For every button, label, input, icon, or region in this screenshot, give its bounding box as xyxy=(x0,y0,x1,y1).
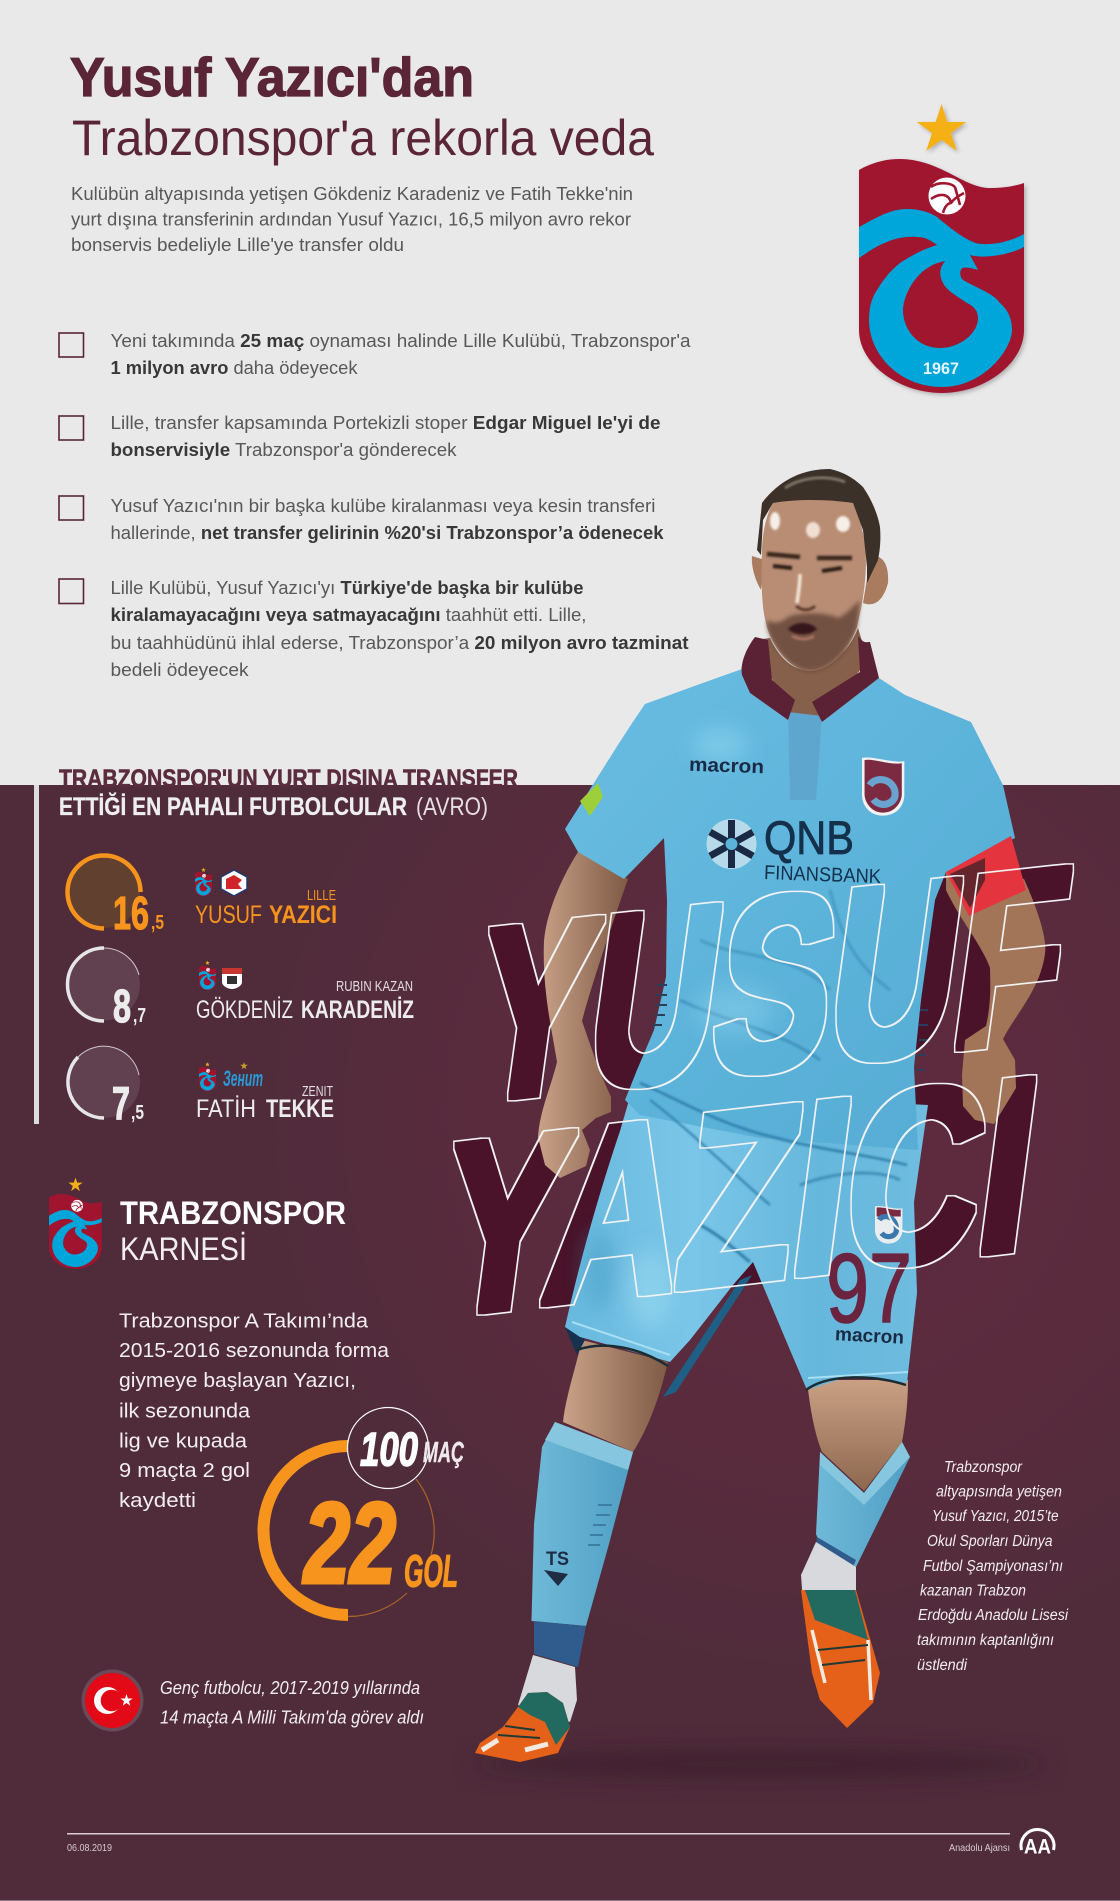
intro paragraph: Kulübün altyapısında yetişen Gökdeniz Karadeniz ve Fatih Tekke'nin xyxy=(71,183,633,204)
stat gauge: 100 maç 22 gol: MAÇ xyxy=(423,1437,465,1469)
sponsor logo: QNB: QNB xyxy=(764,811,854,864)
footer rule xyxy=(67,1833,1010,1834)
right sock xyxy=(816,1442,910,1567)
intro paragraph: yurt dışına transferinin ardından Yusuf Yazıcı, 16,5 milyon avro rekor xyxy=(71,208,631,230)
hair highlights xyxy=(785,478,845,488)
bullet 3: hallerinde, net transfer gelirinin %20'si Trabzonspor’a ödenecek xyxy=(110,522,664,543)
collar placket xyxy=(788,712,822,800)
bullet 4: kiralamayacağını veya satmayacağını taahhüt etti. Lille, xyxy=(110,604,586,625)
transfer row: Yusuf Yazıcı: YAZICI xyxy=(269,902,337,929)
heading: Trabzonspor karnesi: TRABZONSPOR xyxy=(120,1195,346,1231)
sock mark: TS xyxy=(544,1549,569,1586)
shirt side stripes xyxy=(652,985,928,1070)
bullet 1: Yeni takımında 25 maç oynaması halinde Lille Kulübü, Trabzonspor'a xyxy=(110,330,691,351)
left sock cuff xyxy=(545,1422,633,1470)
bullet 4: Lille Kulübü, Yusuf Yazıcı'yı Türkiye'de başka bir kulübe xyxy=(110,577,583,598)
footer date: 06.08.2019 xyxy=(67,1843,112,1854)
right sock cuff xyxy=(820,1442,910,1505)
side note: school championship: üstlendi xyxy=(917,1657,968,1674)
armband xyxy=(946,836,1026,916)
shirt xyxy=(565,669,1015,1150)
facial features xyxy=(767,512,852,639)
left sock stripes xyxy=(588,1505,612,1545)
shorts hem lines xyxy=(572,1322,908,1378)
career text block: lig ve kupada xyxy=(119,1430,248,1452)
transfer row: Gökdeniz Karadeniz: GÖKDENİZ xyxy=(196,997,293,1024)
left white sock xyxy=(518,1655,577,1722)
sponsor logo: QNB xyxy=(706,811,882,888)
bullet 4 xyxy=(59,577,688,680)
icon: Trabzonspor crest small xyxy=(49,1178,102,1269)
neck xyxy=(755,628,868,722)
left sock dark band xyxy=(534,1621,586,1667)
stat gauge: 100 maç 22 gol: GOL xyxy=(404,1546,458,1596)
national team text: Genç futbolcu, 2017-2019 yıllarında xyxy=(160,1677,420,1698)
bullet 3: Yusuf Yazıcı'nın bir başka kulübe kiralanması veya kesin transferi xyxy=(110,495,656,516)
sponsor logo: QNB: FINANSBANK xyxy=(764,862,882,888)
bottom edge line xyxy=(0,1900,1120,1901)
transfer row: Yusuf Yazıcı xyxy=(68,856,337,939)
transfer row: Fatih Tekke: TEKKE xyxy=(266,1096,334,1123)
left sock xyxy=(532,1422,633,1626)
hair xyxy=(757,469,880,583)
bullet 4: bedeli ödeyecek xyxy=(110,659,249,680)
transfer row: Gökdeniz Karadeniz: 8 xyxy=(113,980,131,1032)
bullet 4: bu taahhüdünü ihlal ederse, Trabzonspor’a 20 milyon avro tazminat xyxy=(110,632,688,653)
intro paragraph: bonservis bedeliyle Lille'ye transfer oldu xyxy=(71,234,404,255)
shirt and shorts folds xyxy=(640,890,907,1262)
shorts number 97: 97 xyxy=(826,1233,912,1343)
big text outline: YUSUF YAZICI xyxy=(425,813,1083,1370)
heading: Trabzonspor karnesi: KARNESİ xyxy=(120,1231,247,1267)
right sock band xyxy=(815,1537,856,1574)
footer credit: Anadolu Ajansı xyxy=(949,1843,1010,1854)
bullet 1: 1 milyon avro daha ödeyecek xyxy=(110,357,358,378)
intro paragraph xyxy=(71,183,633,255)
career text block xyxy=(119,1310,390,1512)
side note: school championship: kazanan Trabzon xyxy=(920,1582,1026,1600)
bullet 1 xyxy=(59,330,691,378)
big text fill: YUSUF YAZICI xyxy=(425,813,1083,1370)
transfer row: Fatih Tekke: 7 xyxy=(112,1077,130,1129)
transfer row: Fatih Tekke: Зенит xyxy=(223,1066,263,1091)
title: Trabzonspor'a rekorla veda xyxy=(72,110,654,166)
shirt highlights xyxy=(584,727,775,1330)
career text block: Trabzonspor A Takımı’nda xyxy=(119,1310,369,1332)
right white sock xyxy=(801,1542,856,1603)
shorts left lining xyxy=(565,1327,585,1355)
shorts logo: macron: macron xyxy=(834,1324,904,1349)
side note: school championship: Yusuf Yazıcı, 2015’te xyxy=(932,1508,1059,1525)
shorts back dark panel xyxy=(663,1275,752,1397)
transfer row: Gökdeniz Karadeniz: RUBIN KAZAN xyxy=(336,979,413,995)
transfer row: Fatih Tekke: ,5 xyxy=(131,1101,144,1124)
stat gauge: 100 maç 22 gol xyxy=(264,1408,465,1616)
bullet 3 xyxy=(59,495,664,543)
transfer row: Gökdeniz Karadeniz: ,7 xyxy=(133,1004,146,1027)
transfer row: Yusuf Yazıcı: 16 xyxy=(113,887,149,939)
national team text: 14 maçta A Milli Takım'da görev aldı xyxy=(160,1706,424,1728)
ground shadow under player xyxy=(470,1750,1050,1778)
sock mark: TS: TS xyxy=(546,1549,569,1570)
career text block: ilk sezonunda xyxy=(119,1400,251,1422)
stat gauge: 100 maç 22 gol: 100 xyxy=(360,1422,418,1476)
transfer row: Fatih Tekke xyxy=(68,1046,334,1129)
side note: school championship: Trabzonspor xyxy=(944,1459,1023,1476)
section heading: most expensive transfers: (AVRO) xyxy=(416,794,488,821)
bullet 2: Lille, transfer kapsamında Portekizli stoper Edgar Miguel Ie'yi de xyxy=(110,412,660,433)
background: light upper area xyxy=(0,0,1120,785)
national team text xyxy=(160,1677,424,1728)
left shoe xyxy=(475,1692,570,1762)
vertical bar beside transfers list xyxy=(34,785,39,1124)
transfer row: Fatih Tekke: FATİH xyxy=(196,1096,256,1123)
icon: AA logo: AA xyxy=(1024,1836,1051,1858)
transfer row: Yusuf Yazıcı: ,5 xyxy=(151,911,164,934)
side note: school championship: takımının kaptanlığını xyxy=(917,1632,1054,1649)
icon: Trabzonspor crest large: 1967 xyxy=(923,360,959,378)
shirt crest xyxy=(862,758,904,816)
background: maroon lower area xyxy=(0,785,1120,1901)
section heading: most expensive transfers: TRABZONSPOR'UN YURT DIŞINA TRANSFER xyxy=(59,766,518,793)
shorts crest xyxy=(875,1206,902,1244)
face xyxy=(762,498,866,671)
ears xyxy=(752,556,888,604)
heading: Trabzonspor karnesi xyxy=(120,1195,346,1267)
transfer row: Fatih Tekke: ZENIT xyxy=(302,1084,333,1100)
section heading: most expensive transfers: ETTİĞİ EN PAHALI FUTBOLCULAR xyxy=(59,793,407,821)
left arm xyxy=(538,852,628,1178)
career text block: 9 maçta 2 gol xyxy=(119,1459,250,1482)
transfer row: Gökdeniz Karadeniz xyxy=(68,948,414,1032)
transfer row: Gökdeniz Karadeniz: KARADENİZ xyxy=(301,997,414,1024)
collar xyxy=(742,636,879,722)
side note: school championship: altyapısında yetişen xyxy=(936,1484,1062,1500)
side note: school championship: Erdoğdu Anadolu Lisesi xyxy=(918,1607,1069,1624)
stat gauge: 100 maç 22 gol: 22 xyxy=(303,1480,396,1608)
side note: school championship: Okul Sporları Dünya xyxy=(927,1533,1053,1550)
section heading: most expensive transfers xyxy=(59,766,518,821)
left knee xyxy=(563,1340,668,1452)
shorts xyxy=(565,1090,928,1390)
icon: Trabzonspor crest large xyxy=(859,104,1024,393)
icon: Turkish flag xyxy=(82,1670,144,1732)
stubble beard xyxy=(767,600,860,671)
career text block: giymeye başlayan Yazıcı, xyxy=(119,1369,356,1392)
title xyxy=(70,46,654,166)
right shoe xyxy=(801,1590,880,1728)
side note: school championship xyxy=(917,1459,1069,1674)
transfer row: Yusuf Yazıcı: LILLE xyxy=(307,888,336,904)
bullet 2 xyxy=(59,412,660,460)
title: Yusuf Yazıcı'dan xyxy=(70,46,474,108)
sleeve badge xyxy=(580,783,603,816)
shorts bottom dark edge xyxy=(577,1346,906,1390)
career text block: 2015-2016 sezonunda forma xyxy=(119,1339,390,1362)
bullet 2: bonservisiyle Trabzonspor'a gönderecek xyxy=(110,439,457,460)
player figure: Yusuf Yazıcı xyxy=(475,469,1045,1762)
right knee xyxy=(807,1380,908,1491)
right arm xyxy=(946,872,1045,1124)
shirt logo: macron: macron xyxy=(689,754,764,778)
career text block: kaydetti xyxy=(119,1489,196,1512)
transfer row: Yusuf Yazıcı: YUSUF xyxy=(195,902,262,929)
side note: school championship: Futbol Şampiyonası’nı xyxy=(923,1558,1063,1575)
